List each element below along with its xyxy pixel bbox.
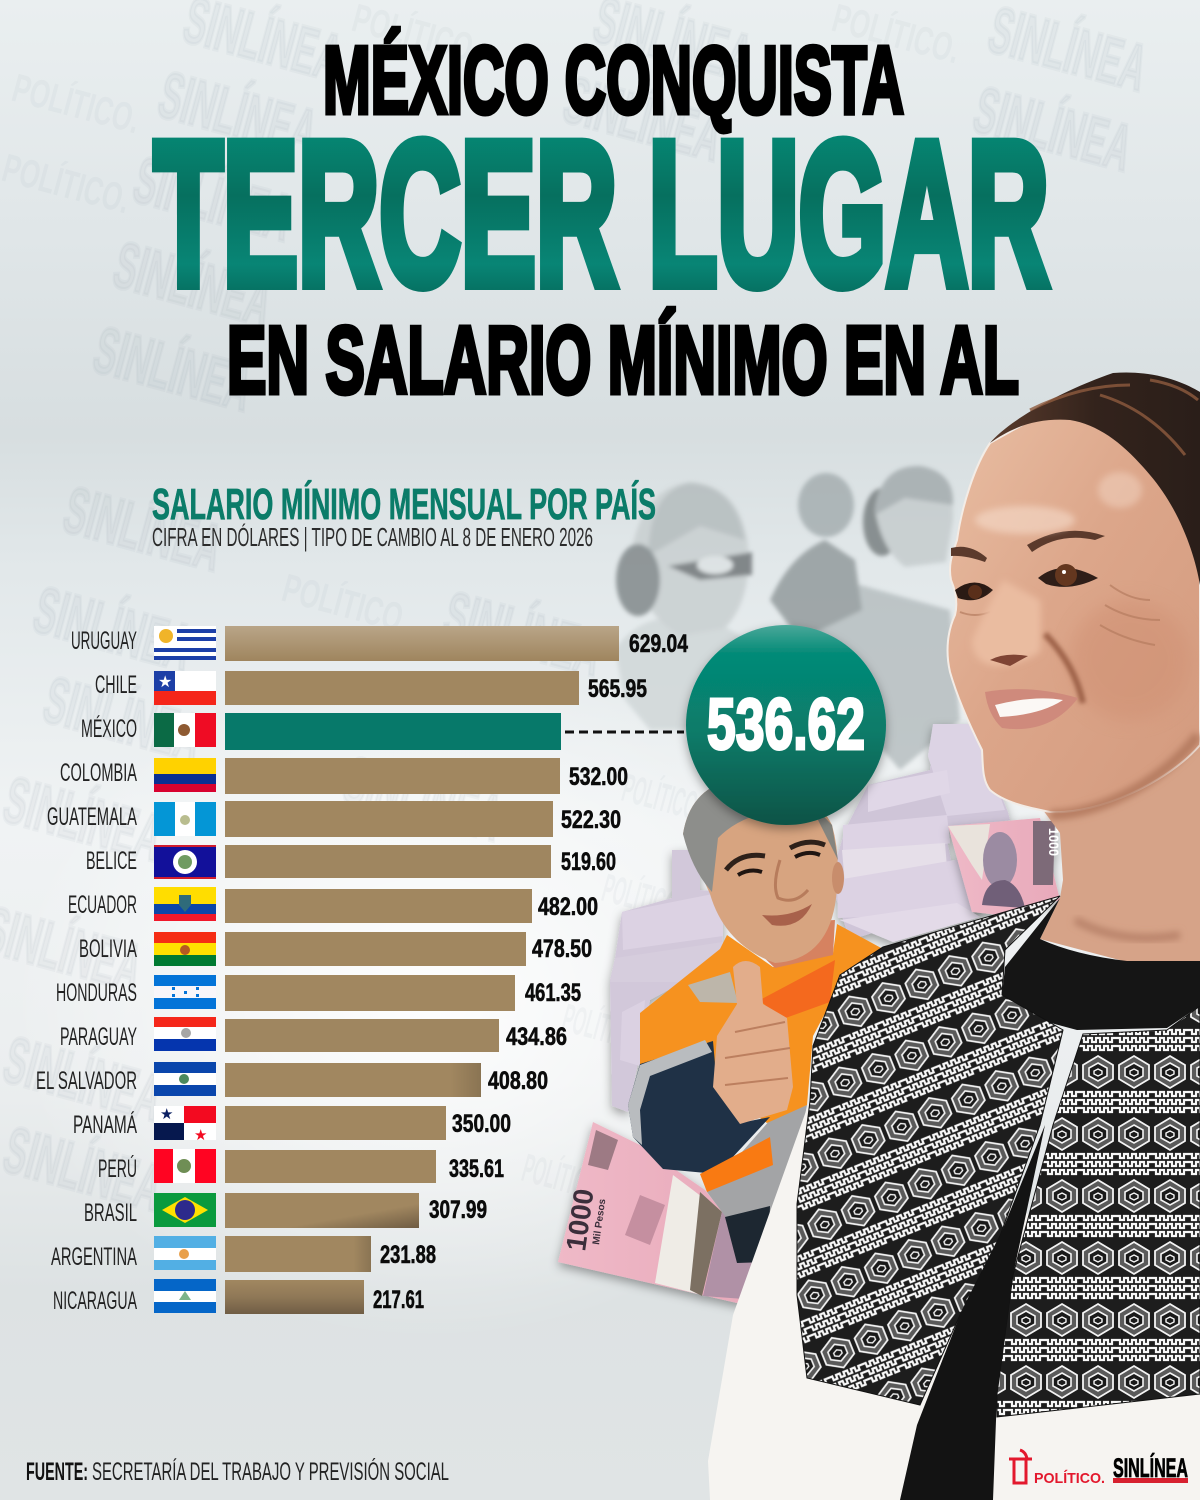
country labels: PERÚ — [98, 1154, 137, 1183]
flag: Bolivia — [154, 932, 216, 966]
country labels: CHILE — [95, 671, 137, 699]
bar values: 217.61 — [373, 1286, 424, 1314]
bar values: 461.35 — [525, 979, 581, 1007]
left eyebrow — [951, 547, 987, 562]
watermark pattern: SINLÍNEA — [36, 662, 210, 775]
watermark pattern — [0, 0, 1155, 1225]
worker eyebrows — [726, 842, 825, 870]
country labels: NICARAGUA — [53, 1287, 137, 1315]
bar values: 307.99 — [429, 1196, 487, 1224]
hair — [990, 372, 1200, 585]
worker neck — [730, 920, 835, 968]
worker sleeve stripe — [628, 1040, 712, 1145]
flag: Panamá: ★ — [160, 1106, 173, 1123]
bar values: 434.86 — [506, 1023, 567, 1051]
flag: Argentina — [154, 1236, 216, 1270]
watermark pattern: POLÍTICO. — [0, 145, 135, 222]
country labels: MÉXICO — [81, 714, 137, 743]
worker hand — [713, 961, 793, 1124]
country labels: URUGUAY — [71, 627, 137, 655]
worker hair — [683, 780, 800, 892]
nasolabial line — [1045, 634, 1083, 703]
watermark pattern: POLÍTICO. — [618, 765, 707, 829]
black centre strip — [900, 1125, 1045, 1500]
source footnote: FUENTE: — [26, 1458, 88, 1486]
illustration: woman portrait — [708, 372, 1200, 1500]
country labels: EL SALVADOR — [36, 1067, 137, 1095]
watermark pattern: SINLÍNEA — [151, 57, 325, 170]
bar values: 532.00 — [569, 763, 628, 791]
neck — [1040, 700, 1200, 962]
worker head — [683, 780, 838, 963]
flag: Guatemala — [154, 802, 216, 836]
watermark pattern: POLÍTICO. — [278, 565, 415, 642]
bar values — [373, 630, 688, 1314]
flag: Ecuador — [154, 887, 216, 921]
flag: Paraguay — [154, 1017, 216, 1051]
chart title: SALARIO MÍNIMO MENSUAL POR PAÍS — [152, 479, 656, 529]
mouth — [985, 689, 1078, 729]
flag: Panamá: ★ — [194, 1127, 207, 1144]
worker mouth — [762, 904, 812, 926]
watermark pattern: SINLÍNEA — [0, 1112, 170, 1225]
bar values: 335.61 — [449, 1155, 504, 1183]
patterned jacket right panel — [997, 1006, 1200, 1417]
hair highlights — [1030, 380, 1198, 455]
nostril — [990, 655, 1028, 666]
watermark pattern: SINLÍNEA — [0, 1022, 170, 1135]
worker nose and cheek — [775, 860, 808, 900]
face — [948, 415, 1200, 812]
temple shine — [1098, 472, 1142, 508]
main title — [154, 27, 1049, 414]
background photo: workers with headsets — [615, 466, 960, 770]
flag: El Salvador — [154, 1062, 216, 1096]
flag: Belice — [154, 845, 216, 879]
banknote: bottom left: Mil Pesos — [591, 1198, 608, 1245]
bar values: 350.00 — [452, 1110, 511, 1138]
right eye — [1038, 564, 1098, 587]
stack: solid mass behind worker — [610, 850, 723, 1112]
left eye — [955, 582, 993, 600]
worker reflective stripe — [688, 972, 738, 1003]
worker orange hem — [700, 1137, 773, 1192]
worker navy sleeve — [628, 1041, 770, 1174]
country labels: COLOMBIA — [60, 759, 137, 787]
country labels: BOLIVIA — [79, 935, 137, 963]
flag: Chile: ★ — [158, 674, 172, 691]
bar values: 522.30 — [561, 806, 621, 834]
worker dark lower jacket — [725, 1206, 770, 1263]
watermark pattern: SINLÍNEA — [556, 62, 730, 175]
right eyebrow — [1027, 531, 1105, 552]
forehead shine — [975, 506, 1075, 534]
country labels: BELICE — [86, 847, 137, 875]
bar values: 519.60 — [561, 848, 616, 876]
worker finger creases — [725, 1022, 790, 1085]
stack: left second — [610, 942, 723, 982]
stack: white band row — [842, 843, 948, 885]
nose — [972, 580, 1041, 665]
flag: Brasil — [154, 1193, 216, 1227]
country labels — [36, 627, 137, 1315]
bars — [225, 626, 619, 1314]
watermark pattern: SINLÍNEA — [0, 762, 170, 875]
bar values: 629.04 — [629, 630, 688, 658]
banknote: bottom left: 1000 — [560, 1187, 600, 1253]
watermark pattern: SINLÍNEA — [26, 572, 200, 685]
bar values: 565.95 — [588, 675, 647, 703]
worker orange vest — [640, 924, 883, 1123]
logo: El Político — [1009, 1450, 1105, 1487]
banknote: bottom left — [558, 1122, 762, 1303]
flag: Perú — [154, 1149, 216, 1183]
patterned jacket left panel — [797, 896, 1063, 1405]
jaw shadow — [1050, 735, 1198, 815]
worker hair right — [808, 800, 838, 860]
logo: El Político: POLÍTICO. — [1034, 1470, 1105, 1487]
black top — [1002, 898, 1200, 1030]
bar values: 231.88 — [380, 1241, 436, 1269]
bar values: 478.50 — [532, 935, 592, 963]
leader line from México bar to callout — [565, 730, 684, 734]
stack: second row — [843, 815, 950, 865]
watermark pattern: POLÍTICO. — [558, 995, 647, 1059]
watermark pattern: SINLÍNEA — [56, 472, 230, 585]
bar values: 408.80 — [488, 1067, 548, 1095]
worker ear — [832, 862, 844, 894]
banknote: top right: 1000 — [1046, 828, 1062, 856]
money stacks — [610, 724, 1010, 1112]
banknote: top right — [948, 818, 1062, 915]
flag: Chile — [154, 671, 216, 705]
bar chart: monthly minimum wage by country — [36, 626, 688, 1315]
flag: Nicaragua — [154, 1279, 216, 1313]
watermark pattern: POLÍTICO. — [518, 1145, 607, 1209]
bar values: 482.00 — [538, 893, 598, 921]
stack: upper row — [868, 770, 950, 812]
watermark pattern: SINLÍNEA — [436, 577, 610, 690]
flag: Panamá — [154, 1106, 216, 1144]
stack: lower front right — [840, 903, 980, 942]
watermark pattern: POLÍTICO. — [8, 65, 145, 142]
stack: top right — [928, 724, 1005, 816]
watermark pattern: SINLÍNEA — [126, 142, 300, 255]
worker trousers — [707, 1105, 807, 1240]
country labels: PANAMÁ — [73, 1110, 137, 1139]
chart subtitle: CIFRA EN DÓLARES | TIPO DE CAMBIO AL 8 DE ENERO 2026 — [152, 522, 593, 552]
worker eyes — [738, 853, 820, 875]
chart heading — [152, 479, 656, 552]
eye wrinkles — [960, 585, 1160, 645]
stack: left large — [622, 892, 723, 950]
source footnote: SECRETARÍA DEL TRABAJO Y PREVISIÓN SOCIAL — [92, 1457, 449, 1486]
callout: México value 536.62 — [686, 625, 886, 825]
watermark pattern: SINLÍNEA — [336, 742, 510, 855]
country labels: PARAGUAY — [60, 1023, 137, 1051]
country labels: HONDURAS — [56, 979, 137, 1007]
callout: México value 536.62: 536.62 — [707, 685, 865, 765]
flag: México — [154, 713, 216, 747]
watermark pattern: POLÍTICO. — [598, 865, 687, 929]
illustration: worker with thumbs up — [628, 780, 883, 1263]
watermark pattern: SINLÍNEA — [106, 227, 280, 340]
stack: solid mass behind right side — [830, 730, 1010, 940]
white jacket — [708, 975, 1200, 1500]
country labels: ARGENTINA — [51, 1243, 137, 1271]
flag: Colombia — [154, 758, 216, 792]
stack: left third — [620, 1000, 645, 1066]
neck crease shading — [1075, 920, 1180, 938]
watermark pattern: SINLÍNEA — [86, 312, 260, 425]
stack: large front right — [837, 857, 983, 918]
flag: Honduras — [154, 975, 216, 1009]
worker red collar shade — [760, 960, 835, 1020]
country labels: BRASIL — [84, 1199, 137, 1227]
source footnote — [26, 1457, 449, 1486]
flag: Uruguay — [154, 626, 216, 660]
country labels: GUATEMALA — [47, 803, 137, 831]
cheek warmth — [1070, 600, 1190, 720]
country labels: ECUADOR — [68, 891, 137, 919]
